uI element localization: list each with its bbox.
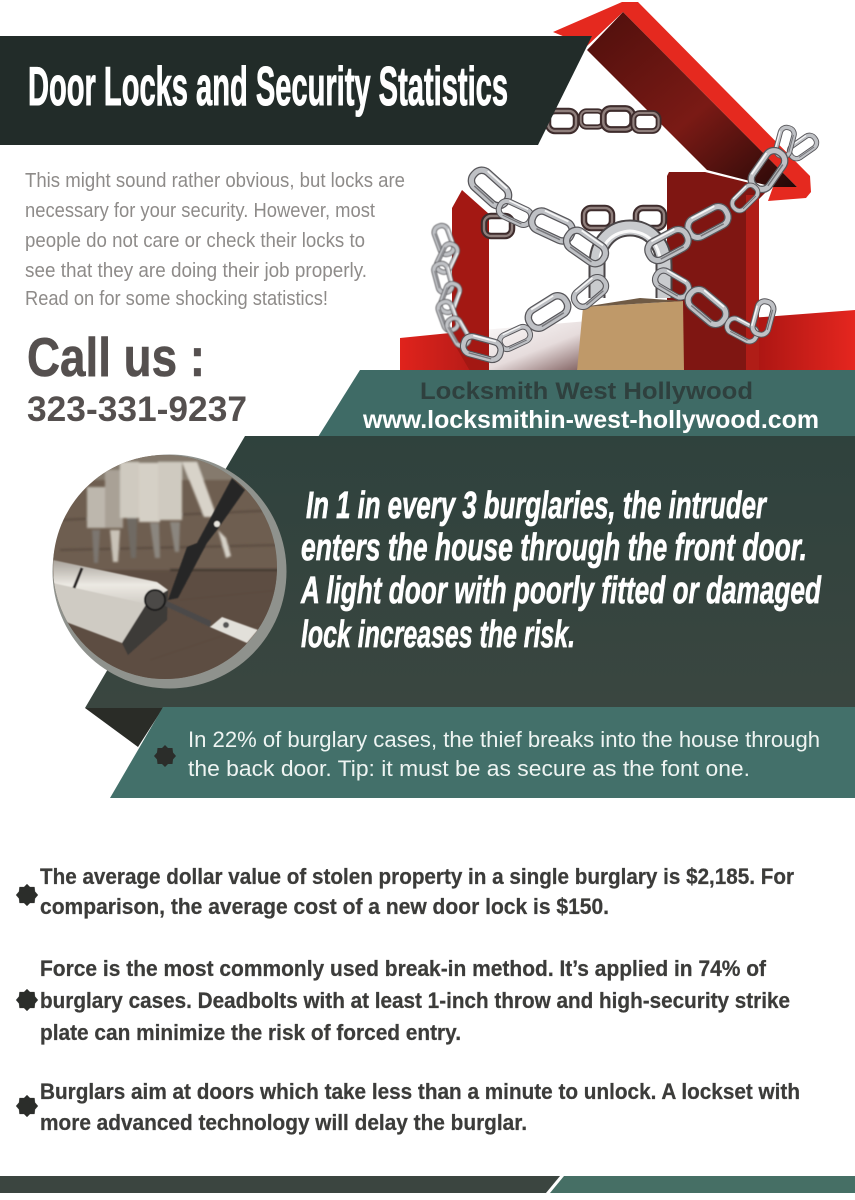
website: www.locksmithin-west-hollywood.com: [362, 406, 819, 434]
lower right chain: [652, 267, 775, 344]
statistic: forced entry: [16, 956, 790, 1045]
statistic: stolen property value: comparison, the average cost of a new door lock is $150.: [40, 894, 609, 919]
intro paragraph: people do not care or check their locks to: [25, 230, 365, 252]
bullet icon: [16, 989, 38, 1011]
photo scene: [50, 450, 280, 685]
intro paragraph: Read on for some shocking statistics!: [25, 288, 328, 310]
padlock shackle: [597, 228, 664, 298]
teal back door panel: [110, 707, 855, 798]
statistic: time to unlock: Burglars aim at doors which take less than a minute to unlock. A lockset with: [40, 1079, 800, 1104]
red floor: [400, 310, 855, 371]
back chain at roof: [548, 108, 659, 131]
back door statistic: In 22% of burglary cases, the thief breaks into the house through: [188, 727, 820, 752]
statistic: stolen property value: The average dollar value of stolen property in a single burglary is $2,185. For: [40, 864, 794, 889]
photo: lock picks and cylinder: [50, 450, 286, 688]
bullet icon: [16, 884, 38, 906]
padlock body: [577, 298, 684, 371]
phone number: 323-331-9237: [27, 390, 247, 429]
statistic: stolen property value: [16, 864, 794, 919]
back door statistic: the back door. Tip: it must be as secure as the font one.: [188, 756, 750, 781]
house left wall: [452, 190, 489, 371]
intro paragraph: This might sound rather obvious, but locks are: [25, 170, 405, 192]
teal contact banner: [318, 370, 855, 437]
footer bar: [0, 1176, 855, 1193]
intro paragraph: see that they are doing their job properly.: [25, 260, 367, 282]
lower left chain: [461, 273, 609, 362]
statistic: time to unlock: [16, 1079, 800, 1135]
house right wall: [667, 172, 770, 371]
bullet icon: [154, 745, 176, 767]
house roof: [553, 2, 811, 201]
photo ring: [52, 454, 286, 688]
back door statistic: [188, 727, 820, 781]
intro paragraph: necessary for your security. However, most: [25, 200, 375, 222]
upper right chain: [644, 126, 819, 264]
upper left chain: [468, 166, 610, 267]
intro paragraph: [25, 170, 405, 310]
dark statistic panel: [85, 436, 855, 708]
statistic: forced entry: Force is the most commonly used break-in method. It’s applied in 74% of: [40, 956, 767, 981]
title band: [0, 36, 592, 145]
left side chain: [432, 224, 472, 348]
main statistic text: lock increases the risk.: [301, 614, 575, 656]
bullet icon: [16, 1095, 38, 1117]
cylinder lock: [53, 478, 258, 655]
house illustration with chains and padlock: [400, 2, 855, 371]
call us heading: Call us :: [27, 326, 205, 388]
statistic: time to unlock: more advanced technology will delay the burglar.: [40, 1110, 527, 1135]
statistic: forced entry: plate can minimize the risk of forced entry.: [40, 1020, 461, 1045]
company name: Locksmith West Hollywood: [420, 378, 753, 405]
dark fold: [85, 708, 163, 747]
main statistic text: [300, 485, 822, 656]
statistic: forced entry: burglary cases. Deadbolts with at least 1-inch throw and high-security strike: [40, 988, 790, 1013]
back chain behind padlock: [484, 208, 664, 236]
